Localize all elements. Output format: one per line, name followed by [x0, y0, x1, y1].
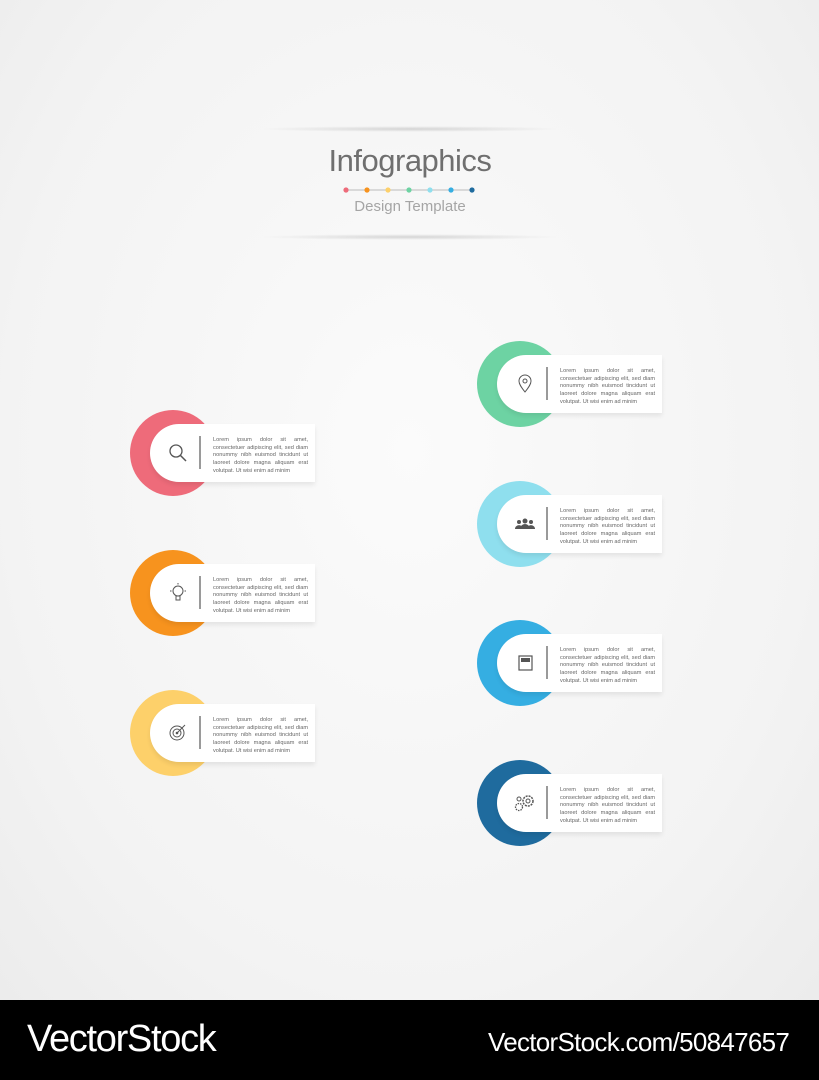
item: gears: Lorem ipsum dolor sit amet, consectetuer adipiscing elit, sed diam nonummy nibh euismod tincidunt ut laoreet dolore magna aliquam erat volutpat. Ut wisi enim ad minim [560, 787, 655, 824]
icon: pin [518, 374, 532, 393]
icon: target [170, 724, 186, 740]
item: bulb: Lorem ipsum dolor sit amet, consectetuer adipiscing elit, sed diam nonummy nibh euismod tincidunt ut laoreet dolore magna aliquam erat volutpat. Ut wisi enim ad minim [213, 577, 308, 614]
item: target [130, 690, 316, 776]
item: book: Lorem ipsum dolor sit amet, consectetuer adipiscing elit, sed diam nonummy nibh euismod tincidunt ut laoreet dolore magna aliquam erat volutpat. Ut wisi enim ad minim [560, 647, 655, 684]
item: gears [477, 760, 662, 846]
subtitle: Design Template [354, 198, 466, 215]
footer bar [0, 1000, 819, 1080]
item: people [477, 481, 662, 567]
icon: magnifier [169, 444, 186, 462]
item: bulb [130, 550, 316, 636]
icon: book [518, 655, 533, 671]
title: Infographics [329, 143, 491, 178]
item: target: Lorem ipsum dolor sit amet, consectetuer adipiscing elit, sed diam nonummy nibh euismod tincidunt ut laoreet dolore magna aliquam erat volutpat. Ut wisi enim ad minim [213, 717, 308, 754]
icon: gears [514, 795, 534, 812]
footer logo: VectorStock [27, 1018, 215, 1060]
item: search: Lorem ipsum dolor sit amet, consectetuer adipiscing elit, sed diam nonummy nibh euismod tincidunt ut laoreet dolore magna aliquam erat volutpat. Ut wisi enim ad minim [213, 437, 308, 474]
item: people: Lorem ipsum dolor sit amet, consectetuer adipiscing elit, sed diam nonummy nibh euismod tincidunt ut laoreet dolore magna aliquam erat volutpat. Ut wisi enim ad minim [560, 508, 655, 545]
icon: people [515, 518, 535, 529]
item: location: Lorem ipsum dolor sit amet, consectetuer adipiscing elit, sed diam nonummy nibh euismod tincidunt ut laoreet dolore magna aliquam erat volutpat. Ut wisi enim ad minim [560, 368, 655, 405]
item: location [477, 341, 662, 427]
item: book [477, 620, 662, 706]
item: search [130, 410, 316, 496]
color dots line [343, 187, 475, 193]
footer id: VectorStock.com/50847657 [488, 1027, 789, 1057]
icon: bulb [170, 583, 186, 600]
